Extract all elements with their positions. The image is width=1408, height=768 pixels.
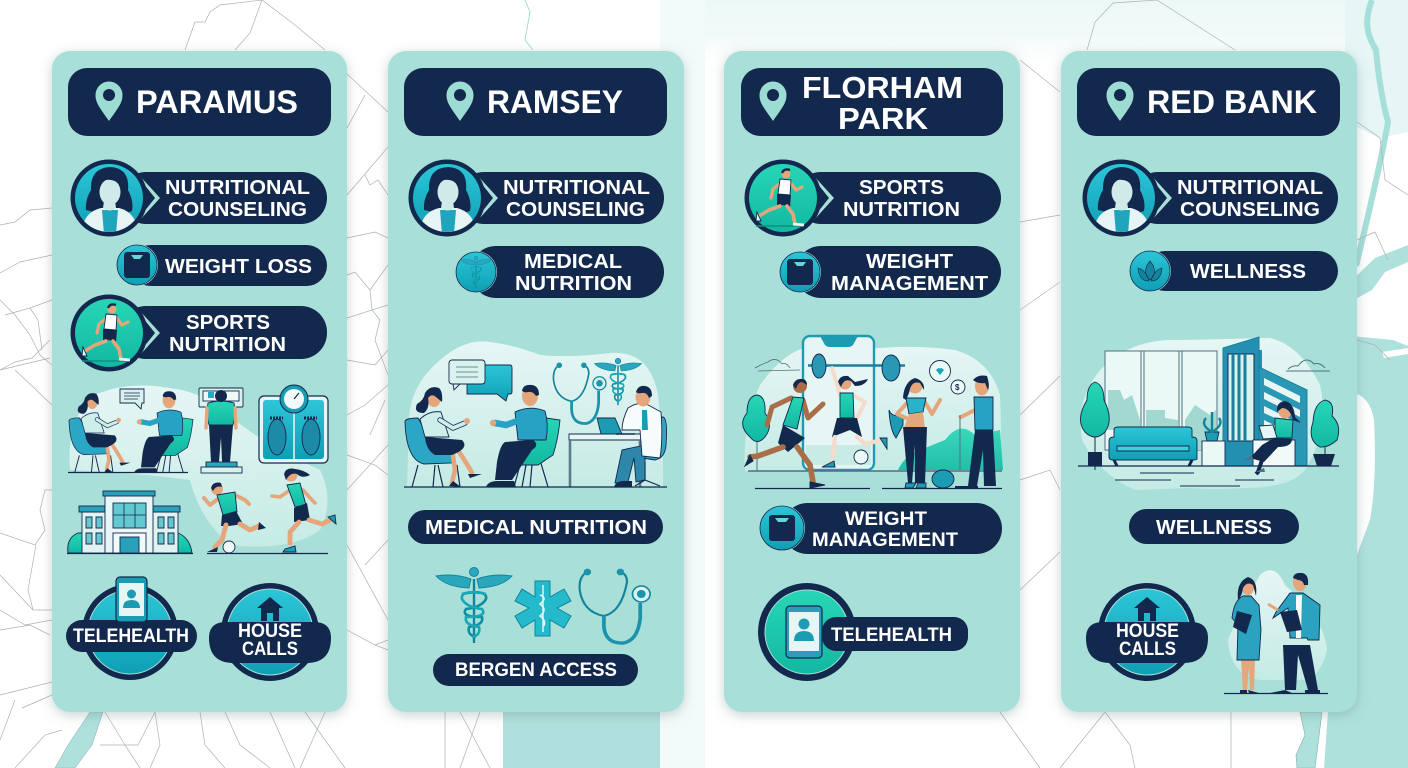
icon: caduceus [436, 568, 512, 643]
icon: star of life [515, 581, 571, 636]
service: nutritional counseling [1082, 160, 1338, 236]
heading: Florham Park: PARK [838, 101, 929, 136]
panel: Red Bank [1061, 51, 1357, 712]
service: nutritional counseling: NUTRITIONAL [503, 177, 650, 199]
heading: Red Bank: RED BANK [1147, 84, 1317, 120]
service: nutritional counseling: COUNSELING [1180, 199, 1320, 221]
service: sports nutrition: SPORTS [859, 177, 944, 199]
service: weight management: WEIGHT [866, 251, 953, 273]
service: sports nutrition: NUTRITION [843, 199, 960, 221]
panel: Florham Park [724, 51, 1020, 712]
heading: Ramsey [404, 68, 667, 136]
label: medical nutrition [408, 510, 663, 544]
label: wellness [1129, 509, 1299, 544]
service: medical nutrition [455, 246, 664, 298]
heading: Red Bank [1077, 68, 1340, 136]
icon: stethoscope [580, 569, 650, 643]
label: Bergen access [433, 654, 638, 686]
service: nutritional counseling: NUTRITIONAL [165, 177, 310, 199]
illustration: consultation and doctor [404, 341, 667, 487]
heading: Florham Park [741, 68, 1003, 136]
label: wellness: WELLNESS [1156, 516, 1272, 539]
service: nutritional counseling [408, 160, 664, 236]
heading: Paramus [68, 68, 331, 136]
badge: house calls [209, 583, 331, 681]
badge: telehealth: TELEHEALTH [73, 626, 189, 647]
panel: Paramus [52, 51, 347, 712]
heading: Florham Park: FLORHAM [802, 70, 963, 105]
service: sports nutrition [744, 160, 1001, 236]
service: nutritional counseling [70, 160, 327, 236]
badge: house calls: CALLS [1119, 639, 1176, 660]
illustration: services scene [67, 385, 336, 554]
heading: Paramus: PARAMUS [136, 84, 298, 120]
badge: house calls: HOUSE [1116, 621, 1179, 642]
service: wellness: WELLNESS [1190, 261, 1306, 283]
service: nutritional counseling: COUNSELING [506, 199, 645, 221]
badge: telehealth [758, 583, 968, 681]
service: sports nutrition: NUTRITION [169, 334, 286, 356]
illustration: fitness and coaching: $ [955, 383, 960, 392]
service: nutritional counseling: NUTRITIONAL [1177, 177, 1323, 199]
badge: telehealth [66, 577, 197, 680]
label: Bergen access: BERGEN ACCESS [455, 659, 617, 681]
service: medical nutrition: MEDICAL [524, 251, 622, 273]
badge: telehealth: TELEHEALTH [831, 625, 952, 646]
service: sports nutrition: SPORTS [186, 312, 270, 334]
service: sports nutrition [70, 294, 327, 372]
illustration: wellness center lounge [1078, 337, 1339, 490]
service: nutritional counseling: COUNSELING [168, 199, 307, 221]
service: weight loss [116, 244, 327, 286]
service: medical nutrition: NUTRITION [515, 273, 632, 295]
label: medical nutrition: MEDICAL NUTRITION [425, 516, 647, 539]
panel: Ramsey [388, 51, 684, 712]
service: weight management: MANAGEMENT [831, 273, 988, 295]
service: weight management banner: MANAGEMENT [812, 530, 958, 551]
badge: house calls [1086, 583, 1208, 681]
badge: house calls: CALLS [242, 639, 298, 660]
service: weight management banner [759, 503, 1002, 554]
illustration: fitness and coaching [743, 336, 1003, 488]
service: weight management [779, 246, 1001, 298]
service: weight loss: WEIGHT LOSS [165, 256, 312, 278]
heading: Ramsey: RAMSEY [487, 84, 623, 120]
illustration: two professionals [1224, 570, 1328, 694]
service: weight management banner: WEIGHT [845, 509, 927, 530]
service: wellness [1129, 250, 1338, 292]
badge: house calls: HOUSE [238, 621, 302, 642]
